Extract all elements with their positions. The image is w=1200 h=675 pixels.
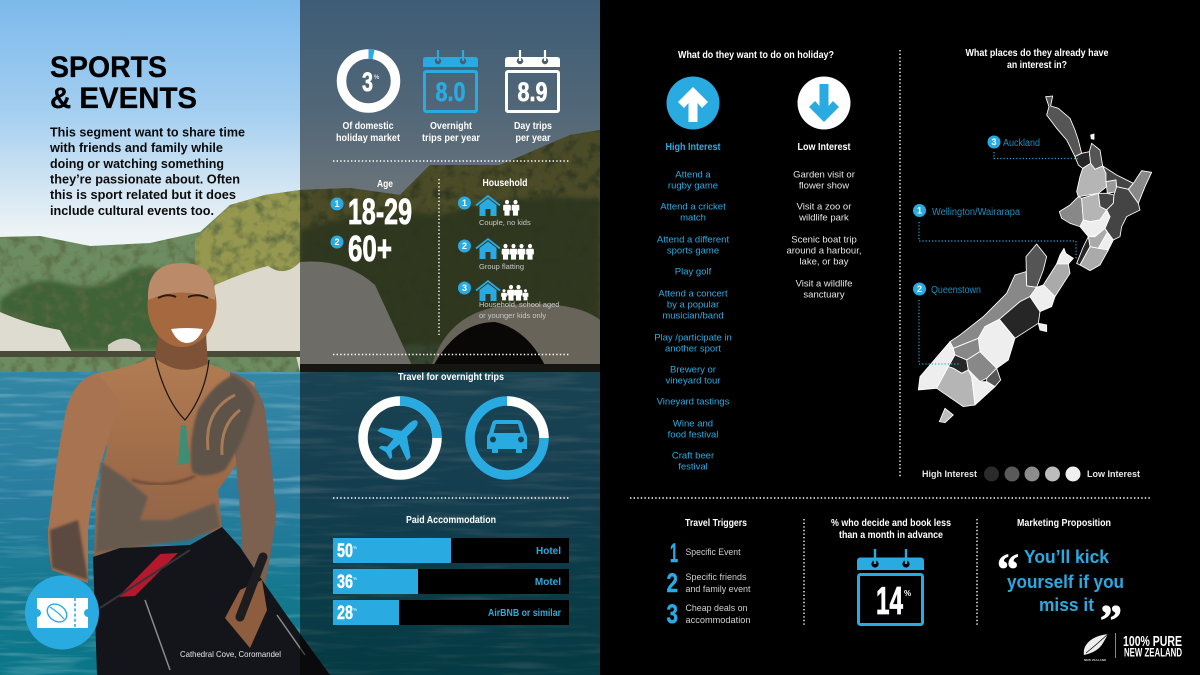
background photo: Cathedral Cove — [0, 0, 600, 675]
travel for overnight trips — [363, 371, 544, 475]
column: low interest: around a harbour, — [786, 246, 862, 256]
chest shadow — [132, 476, 195, 484]
stat: day trips calendar: Day trips — [514, 120, 552, 132]
map of New Zealand regions — [918, 96, 1152, 423]
age block — [330, 178, 412, 269]
callout: Queenstown: 2 — [917, 284, 922, 294]
title — [50, 51, 197, 115]
column: low interest: Low Interest — [798, 141, 851, 153]
necklace and pendant — [155, 357, 209, 465]
travel for overnight trips: Travel for overnight trips — [398, 371, 504, 383]
column: high interest: Attend a different — [657, 234, 729, 246]
donut: car — [470, 401, 544, 475]
stat: overnight trips calendar: Overnight — [430, 120, 472, 132]
callout: Auckland: 3 — [991, 137, 997, 147]
marketing proposition: “ — [997, 545, 1019, 594]
column: low interest: lake, or bay — [799, 256, 849, 268]
paid accommodation bar chart: 36 — [337, 572, 353, 593]
callout: Wellington/Wairarapa: Wellington/Wairarapa — [932, 207, 1020, 218]
travel triggers: Travel Triggers — [685, 517, 747, 529]
intro text: doing or watching something — [50, 156, 224, 171]
left arm — [48, 373, 120, 583]
household block: 1 — [462, 198, 467, 208]
callout: Queenstown: Queenstown — [931, 285, 981, 296]
intro text: include cultural events too. — [50, 203, 214, 218]
household block: Household, school aged — [479, 300, 559, 309]
household block: Household — [482, 177, 528, 189]
marketing proposition: yourself if you — [1007, 571, 1124, 592]
map legend — [922, 466, 1141, 482]
map legend: High Interest — [922, 469, 978, 480]
column: low interest — [786, 76, 862, 300]
paid accommodation bar chart — [333, 514, 569, 625]
heading: holiday interests: What do they want to do on holiday? — [678, 49, 834, 61]
head — [148, 263, 216, 370]
column: low interest: Garden visit or — [793, 170, 855, 180]
title: SPORTS — [50, 51, 167, 84]
callout: Auckland — [988, 136, 1078, 158]
heading: places of interest — [966, 47, 1109, 71]
paid accommodation bar chart: % — [353, 607, 357, 612]
stat: overnight trips calendar: trips per year — [422, 132, 480, 144]
abdomen tattoo — [96, 462, 220, 552]
marketing proposition: You’ll kick — [1024, 546, 1110, 567]
stat: day trips calendar: per year — [516, 132, 550, 144]
intro text: This segment want to share time — [50, 124, 245, 140]
paid accommodation bar chart: 50 — [337, 541, 353, 562]
age block: 18-29 — [348, 191, 412, 232]
column: high interest: Craft beer — [672, 450, 714, 462]
marketing proposition: ” — [1100, 596, 1122, 645]
column: low interest: flower show — [799, 180, 849, 192]
column: high interest: match — [680, 212, 706, 224]
paid accommodation bar chart: AirBNB or similar — [488, 608, 561, 619]
logo: 100% Pure New Zealand — [1084, 633, 1182, 662]
column: high interest: food festival — [668, 430, 718, 440]
paid accommodation bar chart: Motel — [535, 577, 561, 588]
intro text: with friends and family while — [49, 140, 223, 155]
column: low interest: Visit a wildlife — [796, 278, 852, 290]
column: high interest: by a popular — [667, 300, 719, 310]
booking lead time calendar: % — [904, 589, 911, 598]
heading: places of interest: What places do they already have — [966, 47, 1109, 59]
column: high interest: Play /participate in — [654, 332, 732, 344]
travel triggers: accommodation — [686, 615, 750, 626]
column: high interest: musician/band — [662, 310, 724, 322]
icon: ticket with ball — [25, 576, 99, 650]
age block: 1 — [334, 199, 340, 209]
booking lead time calendar: than a month in advance — [839, 529, 943, 541]
column: high interest: Brewery or — [670, 364, 716, 376]
paid accommodation bar chart: % — [353, 545, 357, 550]
heading: places of interest: an interest in? — [1007, 59, 1067, 71]
paid accommodation bar chart: 28 — [337, 603, 353, 624]
title: & EVENTS — [50, 82, 197, 115]
column: high interest: rugby game — [668, 180, 718, 192]
travel triggers — [666, 517, 751, 629]
household block: Couple, no kids — [479, 218, 531, 227]
chest tattoo — [191, 375, 255, 476]
photo caption: Cathedral Cove, Coromandel — [180, 649, 281, 659]
booking lead time calendar: % who decide and book less — [831, 517, 951, 529]
forearm tattoo — [50, 520, 88, 580]
callout: Auckland: Auckland — [1003, 138, 1040, 149]
column: high interest: vineyard tour — [666, 376, 720, 386]
intro text: this is sport related but it does — [50, 187, 236, 202]
callout: Wellington/Wairarapa — [913, 204, 1076, 260]
column: high interest: High Interest — [666, 141, 721, 153]
marketing proposition: miss it — [1039, 594, 1094, 615]
household block — [458, 177, 559, 320]
household block: or younger kids only — [479, 311, 546, 320]
booking lead time calendar — [831, 517, 951, 624]
household block: 2 — [462, 241, 467, 251]
stat: domestic market donut: % — [374, 75, 380, 81]
age block: 2 — [334, 237, 340, 247]
callout: Queenstown — [913, 282, 981, 364]
stat: day trips calendar: 8.9 — [518, 77, 548, 107]
travel triggers: Specific friends — [686, 572, 747, 583]
column: low interest: sanctuary — [803, 290, 845, 300]
age block: Age — [377, 178, 393, 190]
translucent panel overlay — [300, 0, 600, 675]
donut: plane — [363, 401, 437, 475]
travel triggers: 2 — [666, 568, 678, 598]
map legend: Low Interest — [1087, 469, 1141, 480]
paid accommodation bar chart: Paid Accommodation — [406, 514, 496, 526]
travel triggers: 1 — [670, 538, 678, 568]
column: high interest: another sport — [665, 344, 721, 354]
paid accommodation bar chart: Hotel — [536, 546, 561, 557]
torso — [94, 357, 255, 556]
stat: domestic market donut: Of domestic — [342, 120, 394, 132]
column: high interest: Attend a concert — [658, 288, 728, 300]
stat: domestic market donut — [336, 54, 400, 144]
intro text — [49, 124, 245, 218]
household block: Group flatting — [479, 262, 524, 271]
column: high interest: sports game — [667, 246, 719, 256]
marketing proposition — [997, 517, 1124, 645]
age block: 60+ — [348, 228, 392, 269]
paid accommodation bar chart: % — [353, 576, 357, 581]
travel triggers: and family event — [686, 584, 751, 595]
intro text: they’re passionate about. Often — [50, 172, 240, 186]
column: high interest: Vineyard tastings — [657, 396, 730, 408]
wetsuit — [93, 527, 330, 675]
callout: Wellington/Wairarapa: 1 — [917, 206, 922, 216]
column: high interest: Attend a — [675, 170, 711, 180]
person photo — [48, 263, 330, 675]
column: high interest: festival — [678, 462, 708, 472]
stat: day trips calendar — [505, 50, 560, 144]
booking lead time calendar: 14 — [876, 580, 903, 623]
logo: 100% Pure New Zealand: NEW ZEALAND — [1084, 658, 1107, 662]
household block: 3 — [462, 283, 467, 293]
stat: overnight trips calendar — [422, 50, 480, 144]
stat: domestic market donut: holiday market — [336, 132, 400, 144]
column: low interest: Scenic boat trip — [791, 234, 857, 246]
column: high interest: Play golf — [675, 266, 712, 278]
column: low interest: wildlife park — [798, 212, 849, 224]
stat: domestic market donut: 3 — [362, 67, 373, 97]
black panel — [600, 0, 1200, 675]
travel triggers: Cheap deals on — [686, 603, 748, 614]
travel triggers: Specific Event — [686, 547, 741, 558]
column: high interest: Wine and — [673, 418, 713, 430]
right arm — [230, 372, 276, 610]
travel triggers: 3 — [666, 599, 678, 629]
marketing proposition: Marketing Proposition — [1017, 517, 1111, 529]
stat: overnight trips calendar: 8.0 — [436, 77, 466, 107]
column: high interest — [654, 76, 732, 472]
column: low interest: Visit a zoo or — [797, 202, 851, 212]
column: high interest: Attend a cricket — [660, 202, 726, 212]
